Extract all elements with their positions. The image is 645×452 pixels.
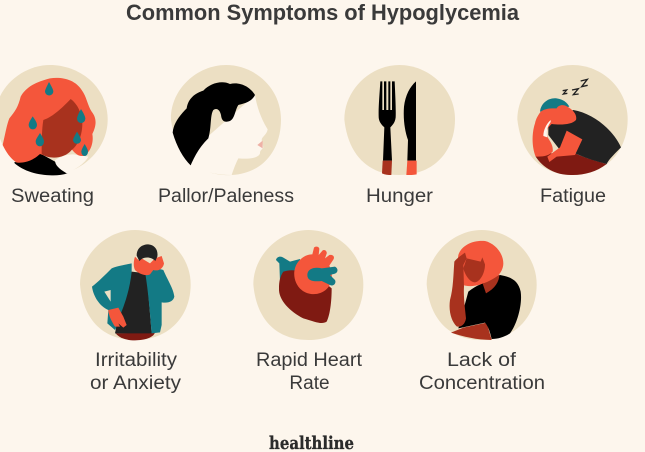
icon: fatigue — [517, 65, 628, 175]
icon: pallor — [171, 65, 281, 175]
title: Common Symptoms of Hypoglycemia — [126, 0, 520, 25]
icon: knife — [404, 81, 416, 161]
label: fatigue: Fatigue — [540, 186, 606, 207]
icon: z letters — [563, 79, 588, 95]
label: rapid heart — [256, 350, 363, 394]
label: concentration: Concentration — [419, 373, 545, 394]
icon: sweating — [0, 65, 108, 175]
icon: fork — [379, 81, 396, 161]
icon: sweat drops — [29, 82, 88, 156]
label: pallor: Pallor/Paleness — [158, 186, 294, 207]
icon: concentration — [427, 230, 537, 340]
icon: hunger — [344, 65, 455, 175]
label: rapid heart: Rapid Heart — [256, 350, 363, 371]
label: irritability: Irritability — [95, 350, 178, 371]
icon: rapid heart — [253, 230, 363, 340]
label: sweating: Sweating — [11, 186, 94, 207]
label: concentration: Lack of — [447, 350, 517, 371]
label: irritability: or Anxiety — [90, 373, 182, 394]
icon: irritability — [80, 230, 191, 340]
label: hunger: Hunger — [366, 186, 434, 207]
label: irritability — [90, 350, 182, 394]
label: rapid heart: Rate — [289, 373, 330, 394]
label: concentration — [419, 350, 545, 394]
